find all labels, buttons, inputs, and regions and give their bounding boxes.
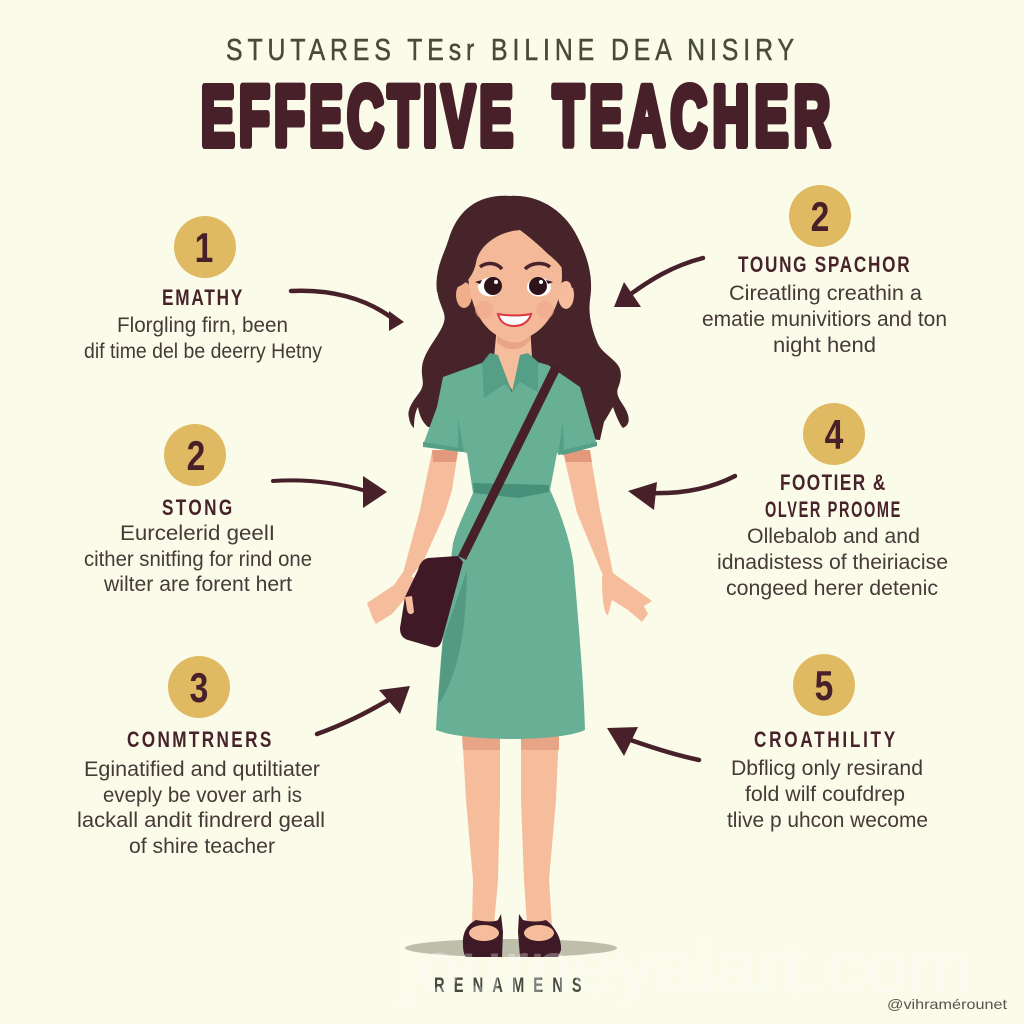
heading 4 xyxy=(765,471,900,522)
bag strap xyxy=(458,363,561,560)
title xyxy=(201,69,830,163)
text 2 left: wilter are forent hert xyxy=(103,573,292,596)
belt xyxy=(473,483,549,498)
text 4: Ollebalob and and xyxy=(747,525,920,548)
arrow 2 left xyxy=(273,476,387,508)
subtitle: STUTARES TEsr BILINE DEA NISIRY xyxy=(226,32,794,67)
heading 4: OLVER PROOME xyxy=(765,497,900,522)
text 2 left: Eurcelerid geelI xyxy=(120,522,275,545)
text 1 xyxy=(84,314,322,363)
text 5: fold wilf coufdrep xyxy=(745,783,905,806)
panel: item 2 left xyxy=(84,424,312,596)
title: TEACHER xyxy=(553,69,830,163)
text 4: idnadistess of theiriacise xyxy=(717,551,948,574)
footer label: RENAMENS xyxy=(434,973,582,997)
face xyxy=(456,226,574,340)
heading 4: FOOTIER & xyxy=(780,471,885,496)
number badge 4 xyxy=(803,403,865,465)
arrow 3 xyxy=(317,686,410,734)
text 2 right xyxy=(702,282,947,357)
heading 3: CONMTRNERS xyxy=(127,728,271,753)
fringe hair xyxy=(436,196,590,292)
panel: item 3 xyxy=(77,656,325,858)
collar xyxy=(482,353,538,398)
dress shadow xyxy=(438,570,467,705)
credit: @vihramérounet xyxy=(887,996,1007,1012)
number badge 1: 1 xyxy=(195,226,213,272)
shoes xyxy=(463,914,561,957)
text 4 xyxy=(717,525,948,600)
text 3: Eginatified and qutiltiater xyxy=(84,758,320,781)
dress xyxy=(423,360,597,739)
text 1: dif time del be deerry Hetny xyxy=(84,340,322,363)
neck shadow xyxy=(497,335,530,349)
panel: item 4 xyxy=(717,403,948,600)
eyes xyxy=(475,263,553,296)
number badge 2 right xyxy=(789,185,851,247)
text 3: eveply be vover arh is xyxy=(103,784,302,807)
heading 2 left: STONG xyxy=(162,496,232,521)
cheeks xyxy=(475,301,554,319)
text 3: of shire teacher xyxy=(129,835,275,858)
neck xyxy=(494,325,532,392)
text 2 right: night hend xyxy=(773,334,876,357)
text 2 left xyxy=(84,522,312,596)
number badge 3: 3 xyxy=(190,666,208,712)
text 2 left: cither snitfing for rind one xyxy=(84,548,312,571)
text 1: Florgling firn, been xyxy=(117,314,288,337)
mouth xyxy=(498,314,531,326)
heading 1: EMATHY xyxy=(162,286,242,311)
ground shadow xyxy=(405,939,617,957)
text 5 xyxy=(727,757,928,832)
text 3 xyxy=(77,758,325,858)
legs xyxy=(462,730,559,925)
arrow 4 xyxy=(628,476,735,510)
number badge 5: 5 xyxy=(815,664,833,710)
number badge 1 xyxy=(174,216,236,278)
arrow 5 xyxy=(607,727,699,760)
number badge 2 left xyxy=(164,424,226,486)
hair back xyxy=(408,196,629,440)
bag xyxy=(400,556,463,647)
panel: item 2 right xyxy=(702,185,947,357)
text 3: lackall andit findrerd geall xyxy=(77,809,325,832)
number badge 4: 4 xyxy=(825,413,843,459)
title: EFFECTIVE xyxy=(201,69,513,163)
arrow 1 xyxy=(291,291,404,331)
text 5: Dbflicg only resirand xyxy=(731,757,923,780)
number badge 3 xyxy=(168,656,230,718)
arrow 2 right xyxy=(614,258,703,307)
sleeve creases xyxy=(423,418,597,455)
number badge 5 xyxy=(793,654,855,716)
panel: item 1 empathy xyxy=(84,216,322,363)
text 2 right: ematie munivitiors and ton xyxy=(702,308,947,331)
panel: item 5 xyxy=(727,654,928,832)
heading 2 right: TOUNG SPACHOR xyxy=(738,253,910,278)
arms and hands xyxy=(367,450,652,624)
number badge 2 left: 2 xyxy=(187,434,205,480)
text 5: tlive p uhcon wecome xyxy=(727,809,928,832)
text 2 right: Cireatling creathin a xyxy=(729,282,922,305)
thumb over bag xyxy=(405,596,414,614)
watermark: journeyaiart.com xyxy=(398,928,972,1008)
illustration: teacher figure xyxy=(367,196,652,957)
number badge 2 right: 2 xyxy=(811,195,829,241)
heading 5: CROATHILITY xyxy=(754,728,895,753)
text 4: congeed herer detenic xyxy=(726,577,938,600)
